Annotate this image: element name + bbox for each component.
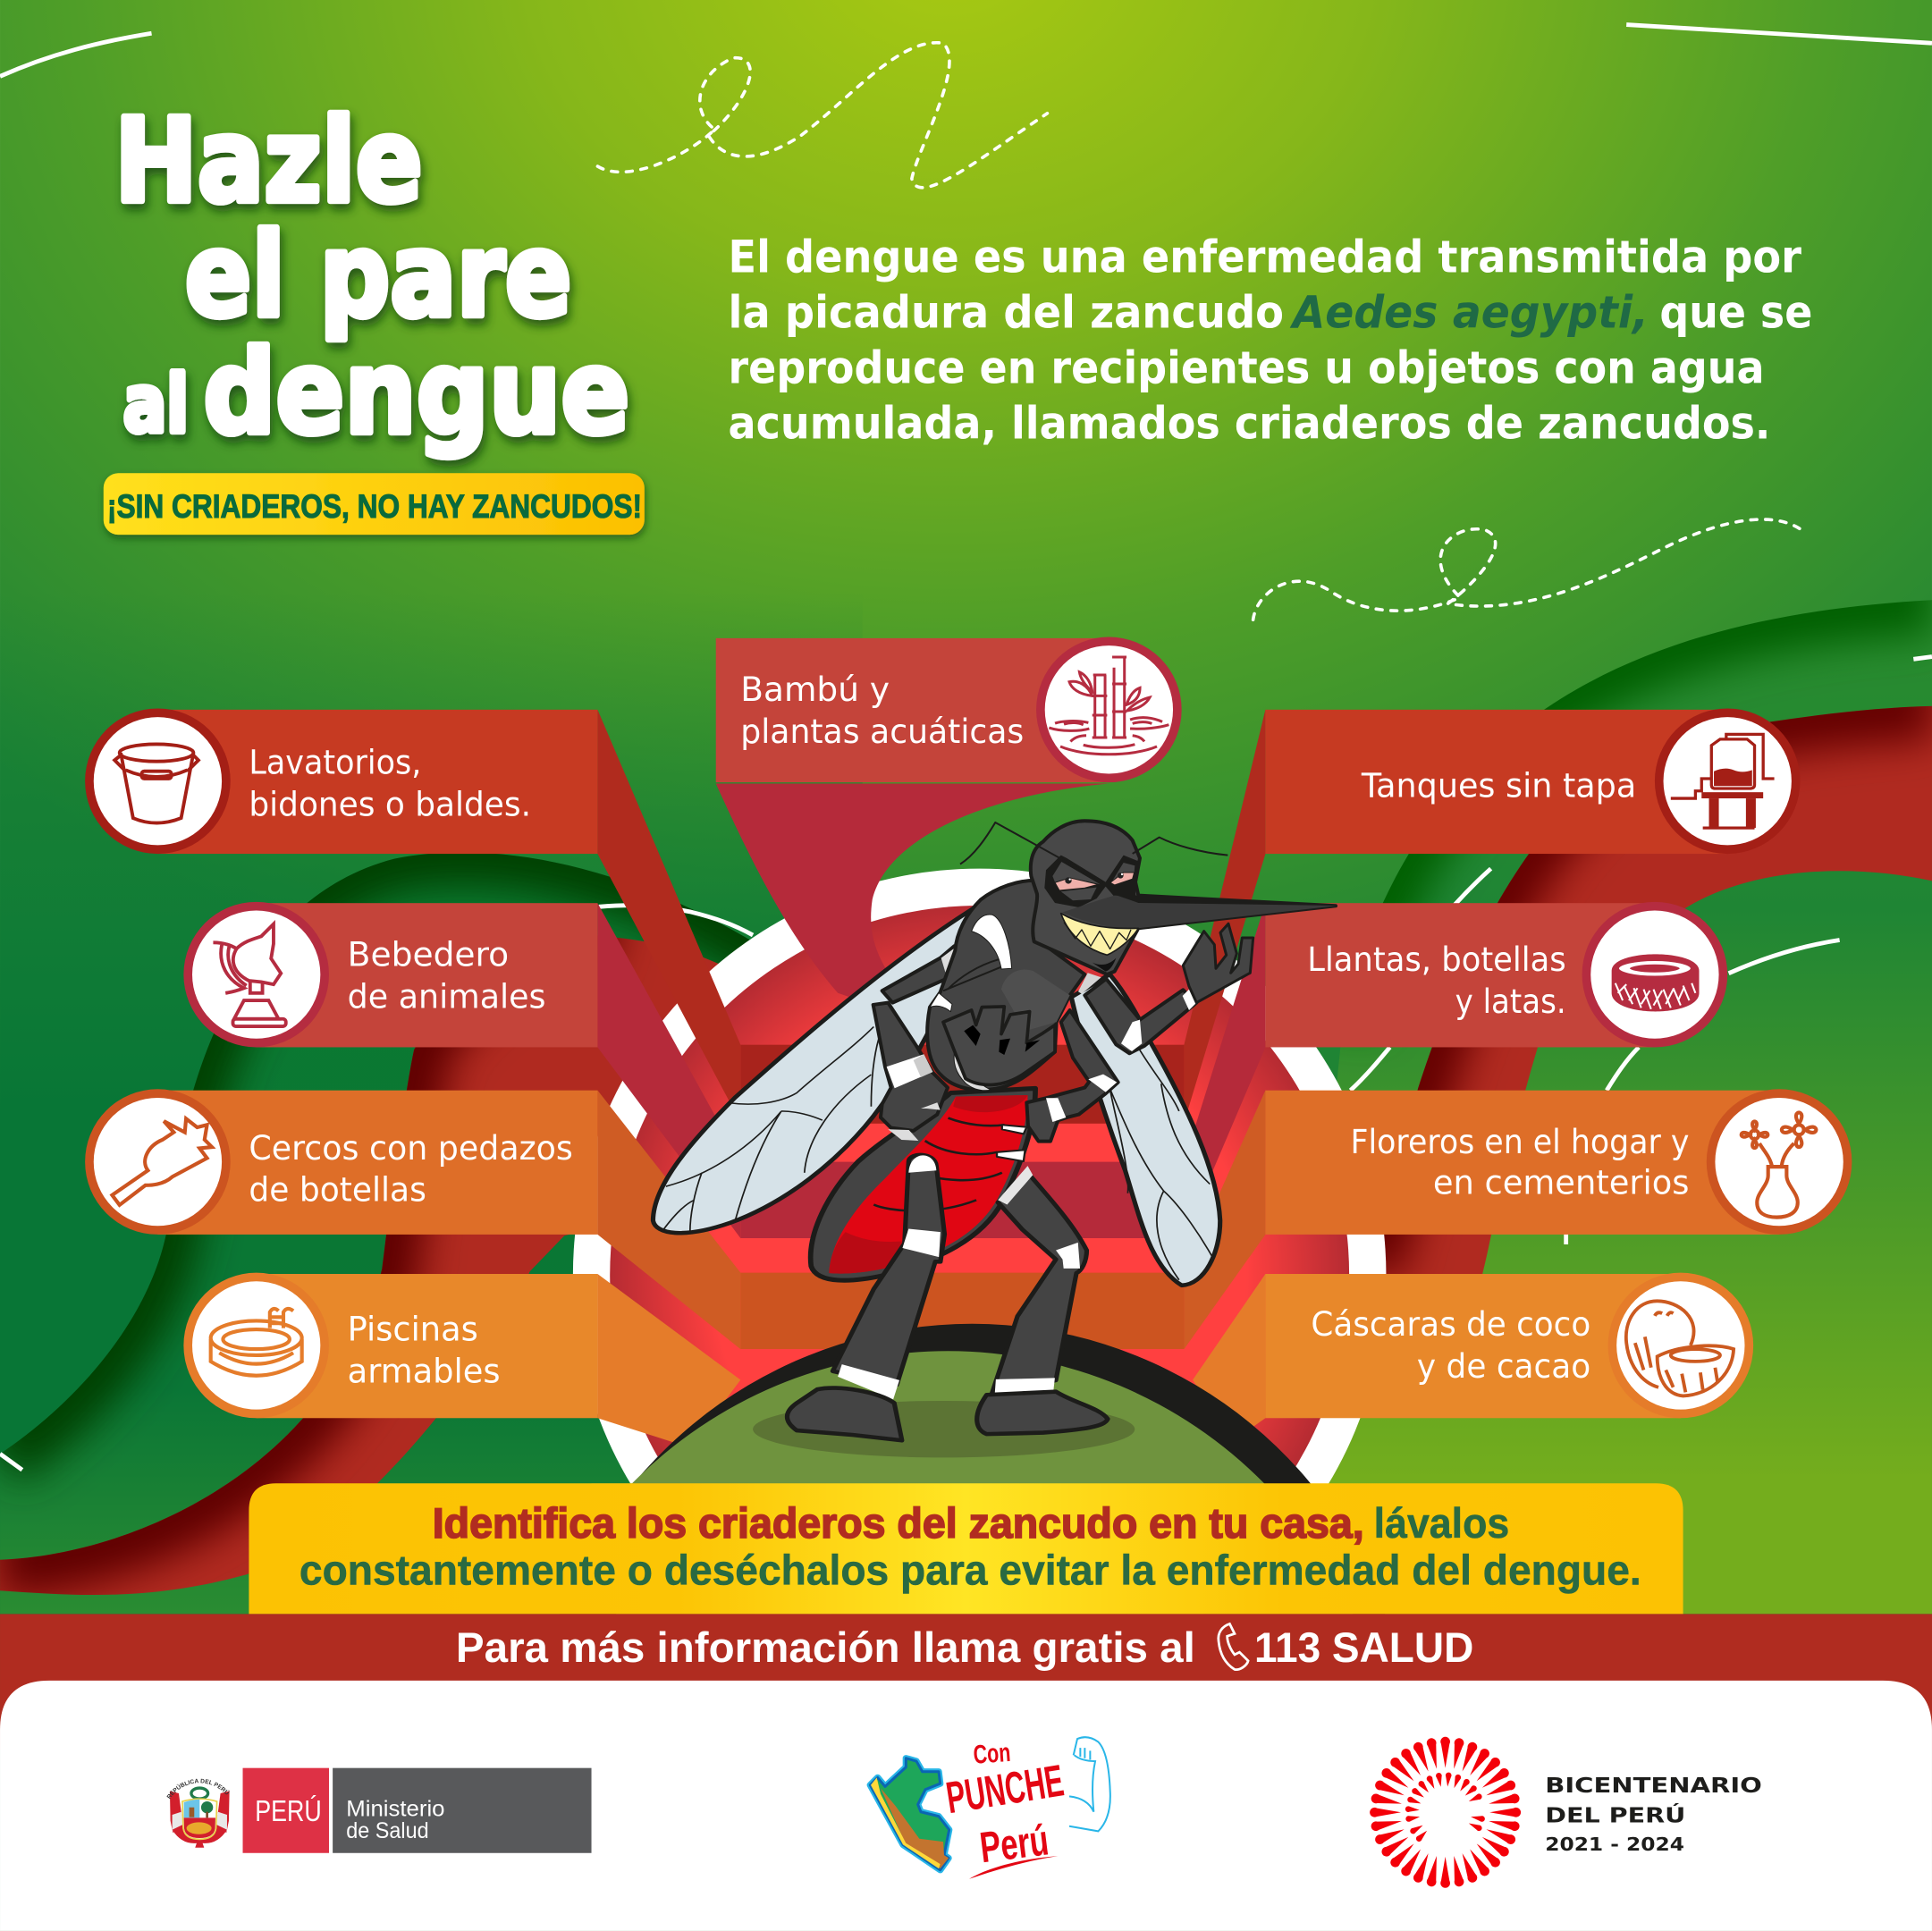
- antennae: [960, 822, 1228, 883]
- decorative white lines: [0, 25, 1932, 1470]
- icon: tire: [1612, 954, 1700, 1011]
- panel: floreros: [1265, 1089, 1852, 1235]
- coat of arms: [166, 1779, 230, 1848]
- logo: bicentenario: BICENTENARIO: [1545, 1773, 1762, 1798]
- icon: pool: [211, 1309, 302, 1376]
- left wing: [653, 905, 979, 1233]
- right arm and hand: [1084, 923, 1253, 1053]
- right red swirl: [1384, 706, 1932, 1274]
- logo: bicentenario: [1370, 1737, 1762, 1888]
- icon: flexed arm: [1069, 1737, 1110, 1831]
- panel: cascaras: [1265, 1273, 1753, 1418]
- panel: llantas: [1265, 902, 1727, 1047]
- panel: bebedero: de animales: [348, 976, 546, 1016]
- title: el pare: [185, 208, 571, 343]
- green hill: [560, 1324, 1385, 1614]
- panel: cercos: Cercos con pedazos: [249, 1128, 573, 1168]
- intro paragraph: reproduce en recipientes u objetos con agua: [729, 342, 1765, 394]
- right green swirl: [1329, 600, 1932, 1615]
- central white ring: [573, 869, 1386, 1682]
- right leg: [977, 1166, 1108, 1434]
- panel: bamboo: [716, 637, 1182, 782]
- panel: lavatorios: [85, 708, 597, 854]
- panel: piscinas: armables: [348, 1351, 501, 1390]
- panel: tanques: Tanques sin tapa: [1361, 766, 1636, 805]
- left red swirl: [0, 935, 719, 1595]
- abdomen: [811, 1088, 1035, 1280]
- mosquito upper body: [873, 821, 1336, 1142]
- dashed flight path right: [1253, 519, 1801, 620]
- panel: tanques: [1265, 708, 1801, 854]
- logo: con punche peru: [870, 1737, 1110, 1879]
- title: al: [123, 358, 189, 450]
- call to action card: Identifica los criaderos del zancudo en tu casa,: [433, 1500, 1364, 1547]
- title: dengue: [203, 325, 629, 460]
- dashed flight path top: [597, 43, 1047, 188]
- panel: lavatorios: bidones o baldes.: [249, 784, 531, 823]
- panel: bebedero: Bebedero: [348, 934, 509, 974]
- mosquito illustration: [653, 821, 1336, 1440]
- lower right arm: [1026, 1010, 1118, 1142]
- panel: cercos: [85, 1089, 597, 1235]
- icon: phone: [1219, 1623, 1248, 1670]
- panel: cascaras: y de cacao: [1417, 1346, 1590, 1386]
- panel: lavatorios: Lavatorios,: [249, 742, 421, 781]
- footer: [0, 1681, 1932, 1931]
- icon: coconut: [1626, 1301, 1734, 1396]
- panel: floreros: Floreros en el hogar y: [1350, 1122, 1689, 1161]
- clawed hand over belly: [943, 1007, 1055, 1084]
- logo: con punche peru: Perú: [977, 1816, 1051, 1872]
- left leg: [787, 1155, 944, 1440]
- side extrusions right: [1184, 710, 1265, 1441]
- icon: broken bottle: [112, 1118, 212, 1205]
- panel: cascaras: Cáscaras de coco: [1311, 1304, 1590, 1344]
- logo: bicentenario: DEL PERÚ: [1545, 1802, 1685, 1827]
- slogan pill: [104, 473, 645, 535]
- panel: llantas: Llantas, botellas: [1307, 940, 1566, 979]
- icon: bucket: [114, 744, 198, 823]
- map of Peru: [870, 1758, 949, 1870]
- call to action card: constantemente o deséchalos para evitar la enfermedad del dengue.: [300, 1547, 1641, 1593]
- head: [1031, 821, 1336, 974]
- right wing: [1071, 974, 1220, 1286]
- logo: Peru ministry of health: [166, 1768, 592, 1853]
- title: [114, 94, 629, 460]
- intro paragraph: [729, 232, 1812, 450]
- coat of arms: REPÚBLICA DEL PERÚ: [166, 1779, 230, 1799]
- left green swirl: [0, 854, 749, 1615]
- thorax: [927, 881, 1101, 1091]
- intro paragraph: la picadura del zancudo: [729, 287, 1284, 339]
- logo: Peru ministry of health: PERÚ: [255, 1794, 322, 1828]
- central stepped panels: [740, 1045, 1184, 1460]
- panel: piscinas: [183, 1273, 597, 1418]
- panel: bamboo: plantas acuáticas: [740, 712, 1024, 751]
- call to action card: lávalos: [1374, 1500, 1509, 1547]
- logo: Peru ministry of health: Ministerio: [346, 1797, 445, 1821]
- panel: llantas: y latas.: [1455, 982, 1566, 1021]
- intro paragraph: que se: [1659, 287, 1812, 339]
- logo: Peru ministry of health: de Salud: [346, 1819, 429, 1843]
- icon: horse at trough: [213, 924, 286, 1026]
- panel: cercos: de botellas: [249, 1170, 426, 1210]
- phone band: 113 SALUD: [1254, 1624, 1473, 1671]
- logo: bicentenario: 2021 - 2024: [1545, 1834, 1684, 1855]
- logo: con punche peru: Con: [973, 1738, 1011, 1770]
- icon: vase with flowers: [1742, 1112, 1816, 1218]
- panel: piscinas: Piscinas: [348, 1309, 478, 1348]
- icon: radial sun: [1370, 1737, 1521, 1888]
- intro paragraph: acumulada, llamados criaderos de zancudos.: [729, 398, 1770, 450]
- icon: bamboo: [1049, 657, 1168, 755]
- back left arm: [873, 946, 958, 1141]
- phone band: Para más información llama gratis al: [456, 1624, 1195, 1671]
- icon: water tank: [1671, 734, 1775, 828]
- phone band: [0, 1614, 1932, 1750]
- slogan pill: ¡SIN CRIADEROS, NO HAY ZANCUDOS!: [107, 487, 642, 525]
- call to action card: [249, 1483, 1683, 1614]
- intro paragraph: El dengue es una enfermedad transmitida por: [729, 232, 1801, 283]
- crimson funnel under bamboo panel: [716, 784, 1109, 1023]
- side extrusions left: [597, 710, 740, 1447]
- grin with teeth: [1061, 914, 1138, 955]
- panel: bebedero: [183, 902, 597, 1047]
- intro paragraph: Aedes aegypti,: [1289, 287, 1649, 339]
- logo: con punche peru: PUNCHE: [943, 1755, 1067, 1823]
- proboscis: [1062, 896, 1336, 928]
- panel: bamboo: Bambú y: [740, 670, 890, 709]
- title: Hazle: [114, 94, 423, 229]
- panel: floreros: en cementerios: [1433, 1162, 1689, 1202]
